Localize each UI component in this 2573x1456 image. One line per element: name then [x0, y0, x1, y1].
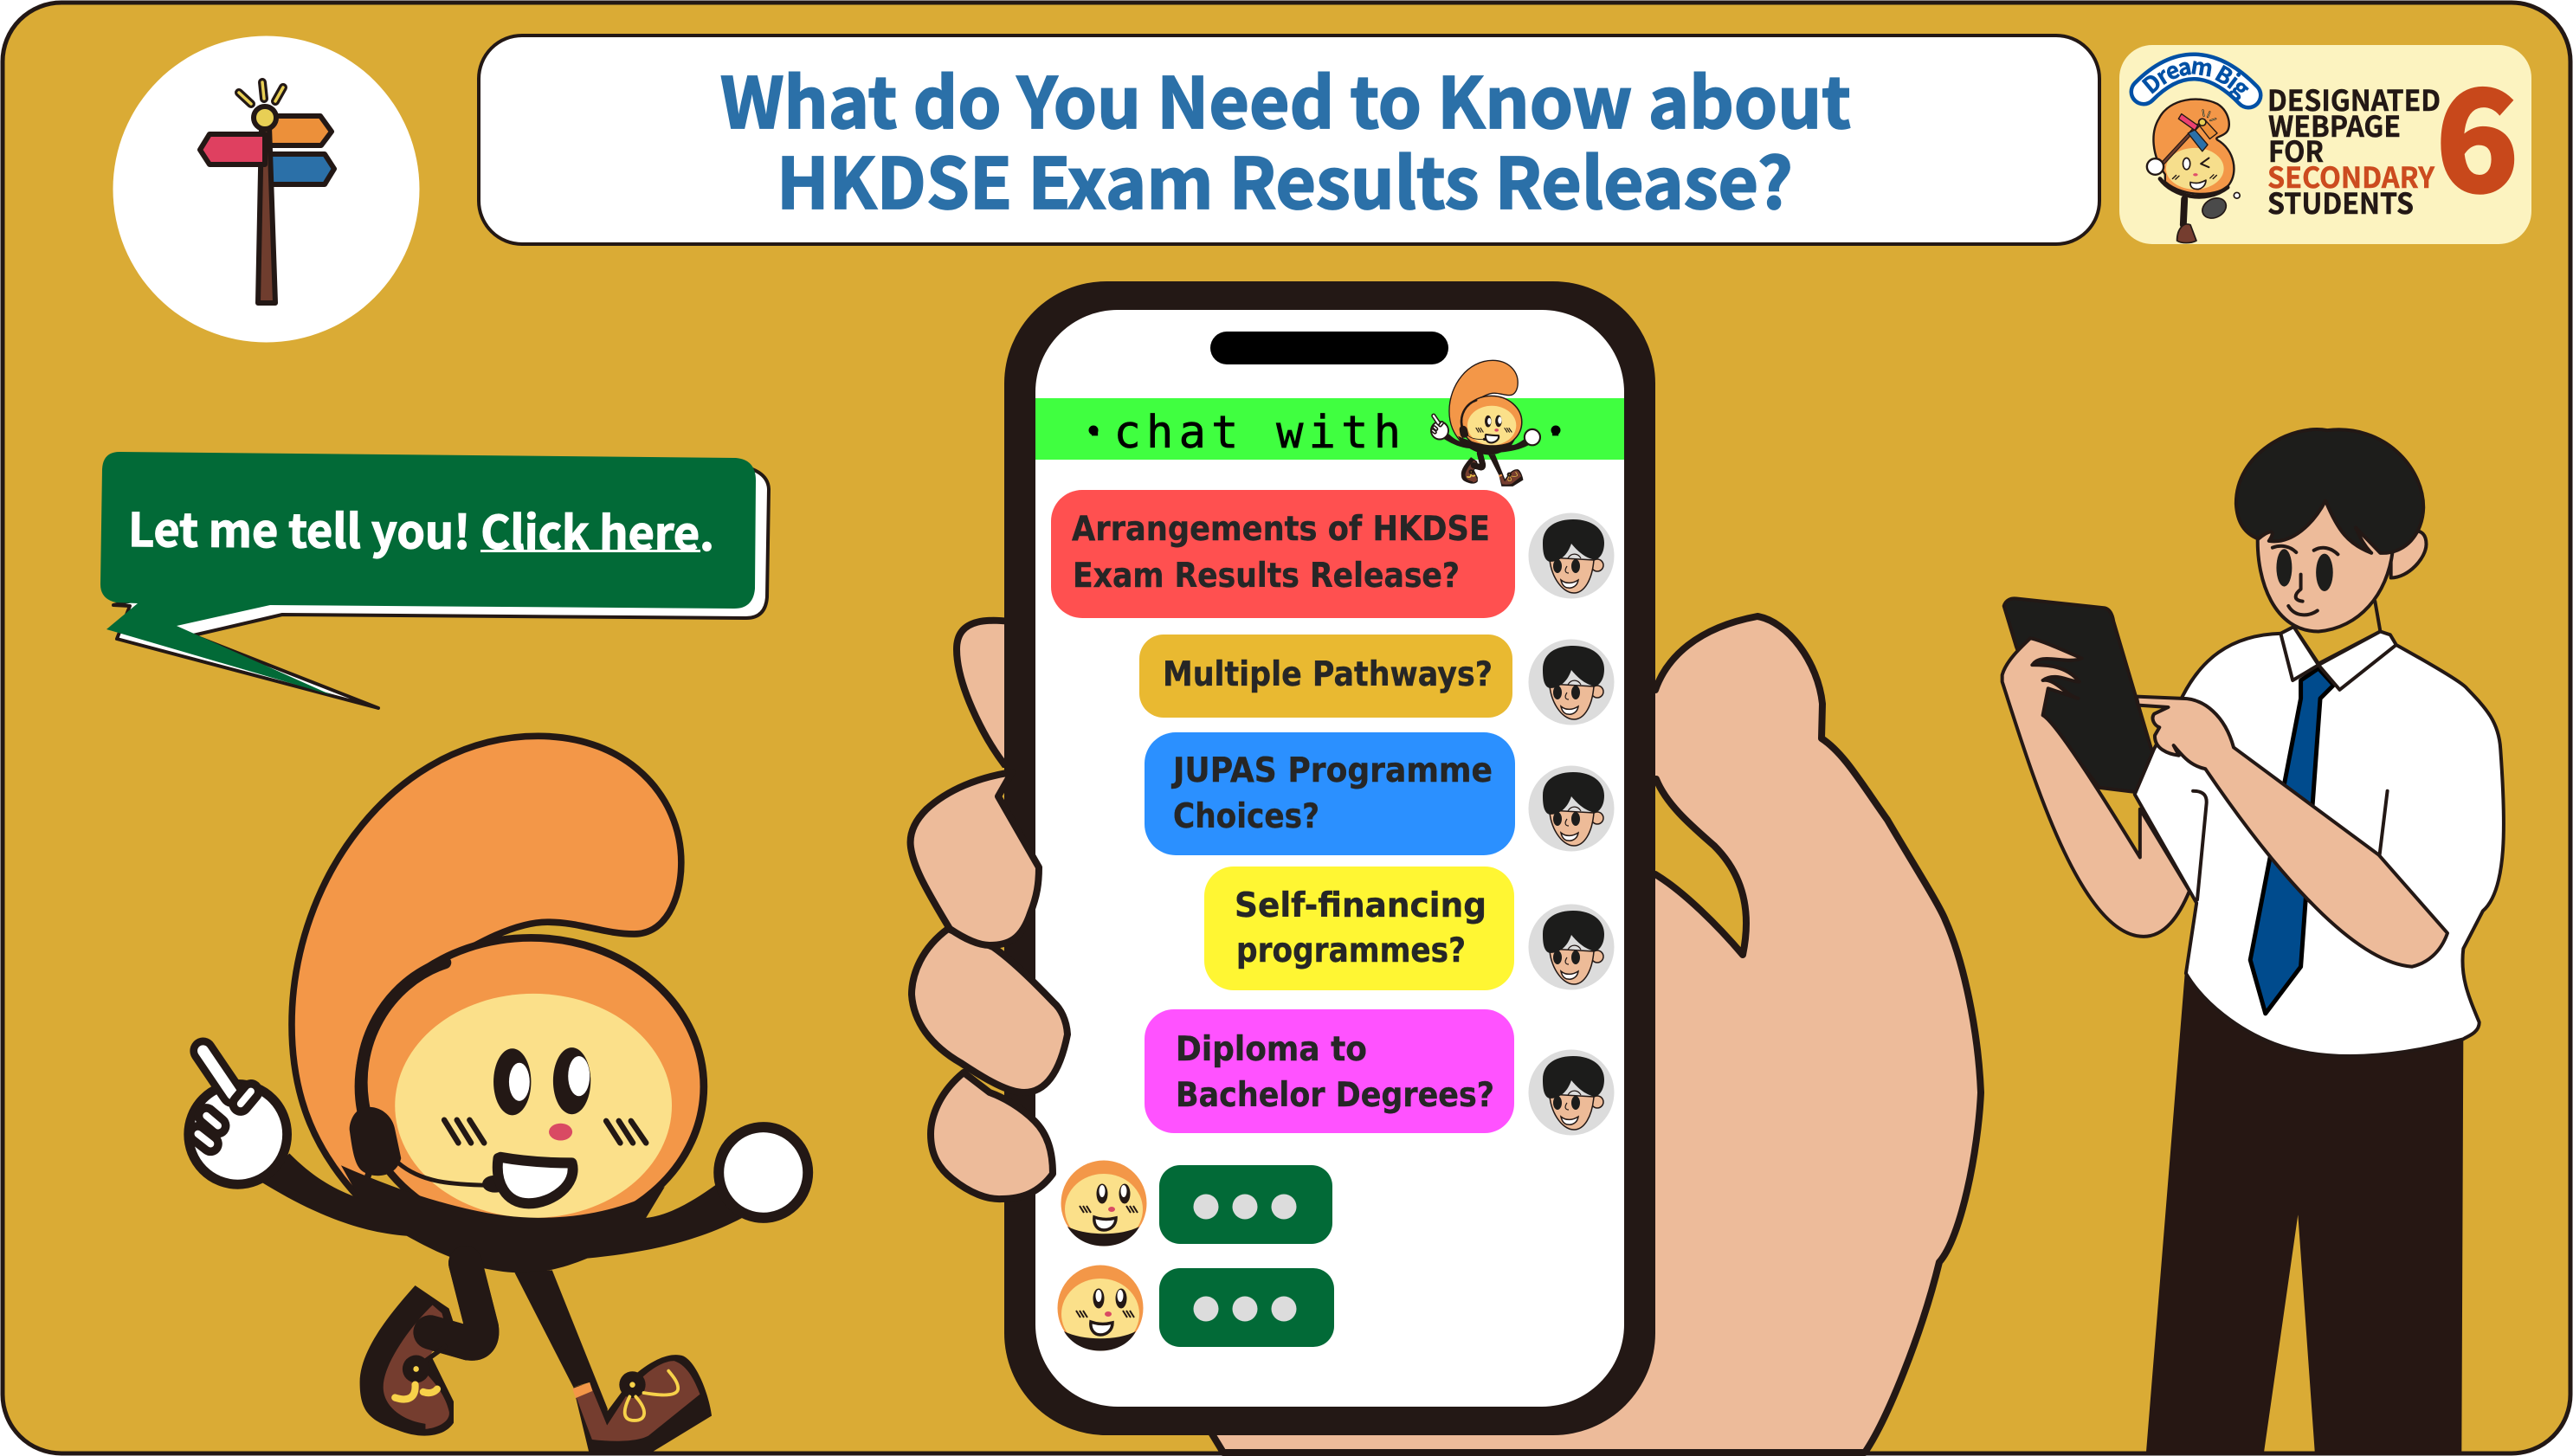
- chat bubble: self-financing: Self-financing: [1235, 886, 1486, 925]
- badge text: WEBPAGE: [2268, 104, 2401, 145]
- trousers: [2146, 973, 2463, 1454]
- icon: signpost in white circle: [113, 36, 419, 343]
- chat header text: ·chat with: [1081, 407, 1401, 459]
- shirt: [2135, 627, 2504, 1056]
- badge text: DESIGNATED: [2267, 78, 2441, 119]
- chat bubble: self-financing: programmes?: [1236, 931, 1466, 970]
- chat bubble: pathways: Multiple Pathways?: [1163, 655, 1493, 694]
- head: [2391, 531, 2426, 577]
- typing bubble 1: [1159, 1165, 1332, 1244]
- badge text: [2267, 78, 2441, 222]
- badge text: FOR: [2268, 129, 2324, 171]
- right arm: [2137, 697, 2447, 967]
- chat bubble: diploma: Diploma to: [1176, 1030, 1367, 1069]
- chat bubble: pathways: [1139, 635, 1512, 718]
- chat bubble: arrangements: Exam Results Release?: [1073, 557, 1460, 596]
- callout: let me tell you: [100, 452, 769, 708]
- title text: What do You Need to Know about: [720, 48, 1851, 149]
- Dream Big arched label: Dream Big: [2142, 61, 2249, 100]
- mascot avatars: [1058, 1160, 1146, 1350]
- phone: [1004, 281, 1655, 1435]
- badge text: SECONDARY: [2267, 155, 2435, 196]
- chat header bar: [1035, 398, 1624, 460]
- badge mascot: [2147, 100, 2240, 243]
- chat bubble: arrangements: Arrangements of HKDSE: [1072, 510, 1490, 549]
- tablet: [2004, 598, 2161, 794]
- title box: [479, 35, 2099, 244]
- student with tablet: [2002, 429, 2504, 1454]
- left arm: [2002, 638, 2189, 937]
- typing bubble 2: [1159, 1268, 1334, 1347]
- chat bubble: JUPAS: JUPAS Programme: [1170, 751, 1493, 790]
- hand holding phone: palm and thumb: [1209, 616, 1981, 1453]
- phone: ·: [1542, 407, 1569, 459]
- badge text: STUDENTS: [2267, 181, 2414, 222]
- finger behind phone: [957, 621, 1017, 764]
- big number 6: 6: [2436, 30, 2518, 231]
- chat bubble: arrangements: [1051, 490, 1515, 618]
- fingers over phone: [911, 772, 1067, 1199]
- chat bubble: self-financing: [1204, 867, 1514, 990]
- collar: [2280, 627, 2396, 690]
- student avatars: [1529, 512, 1614, 1136]
- chat bubble: diploma: Bachelor Degrees?: [1176, 1076, 1494, 1115]
- phone notch: [1210, 332, 1448, 364]
- chat bubble: diploma: [1145, 1009, 1514, 1133]
- chat bubble: JUPAS: [1145, 732, 1515, 855]
- title text: HKDSE Exam Results Release?: [777, 128, 1793, 229]
- small mascot: [1431, 360, 1540, 486]
- tie: [2250, 668, 2334, 1014]
- badge: designated webpage for secondary students 6: [2119, 30, 2531, 244]
- mascot character: [189, 736, 808, 1452]
- chat bubble: JUPAS: Choices?: [1173, 797, 1319, 836]
- callout text: Let me tell you! Click here.: [128, 494, 714, 564]
